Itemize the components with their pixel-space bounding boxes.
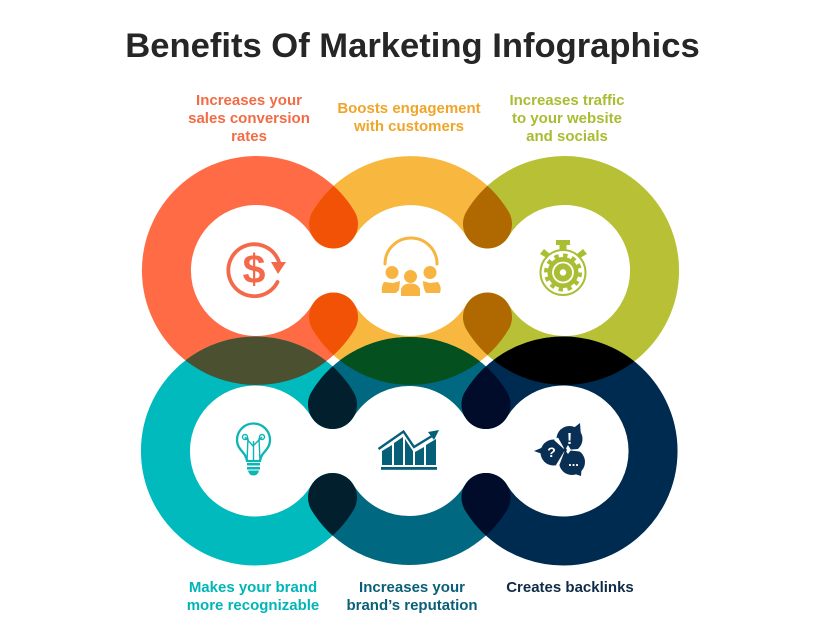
label: sales conversion	[188, 92, 310, 145]
icon: light bulb	[237, 424, 270, 476]
icon: speech bubbles	[534, 423, 585, 476]
label: reputation: Increases your	[359, 579, 465, 596]
overlap: teal and dark teal teardrops	[308, 366, 357, 536]
overlap: green and navy lens	[493, 336, 634, 385]
label: traffic: Increases traffic	[509, 92, 625, 109]
title: Benefits Of Marketing Infographics	[125, 27, 700, 65]
icon: speech bubbles: ?	[547, 444, 556, 460]
overlap: yellow and green teardrops	[463, 186, 512, 355]
icon: dollar cycle	[228, 244, 286, 296]
label: sales conversion: rates	[231, 128, 267, 145]
icon: audience group	[382, 238, 441, 296]
label: engagement: with customers	[353, 118, 464, 135]
ring: yellow	[334, 181, 488, 360]
icon: speech bubbles: !	[567, 431, 572, 448]
icon: speech bubbles: ...	[568, 454, 579, 469]
label: traffic: and socials	[526, 128, 608, 145]
overlap: orange and yellow teardrops	[309, 186, 358, 355]
ring: navy	[486, 361, 653, 541]
ring: orange	[166, 180, 334, 360]
label: reputation: brand’s reputation	[346, 597, 478, 614]
icon: dollar cycle: $	[243, 246, 266, 292]
icon: stopwatch with gear	[540, 240, 587, 295]
icon: growth chart	[378, 430, 439, 470]
label: traffic: to your website	[512, 110, 622, 127]
overlap: yellow and dark teal lens	[340, 337, 480, 385]
ring: teal	[165, 361, 332, 541]
overlap: dark teal and navy teardrops	[462, 366, 510, 536]
label: sales conversion: Increases your	[196, 92, 302, 109]
label: traffic	[509, 92, 625, 145]
label: engagement	[337, 100, 481, 135]
label: sales conversion: sales conversion	[188, 110, 310, 127]
label: engagement: Boosts engagement	[337, 100, 481, 117]
overlap: orange and teal lens	[186, 336, 326, 385]
label: recognizable: Makes your brand	[189, 579, 317, 596]
label: recognizable	[187, 579, 319, 614]
label: backlinks: Creates backlinks	[506, 579, 634, 596]
ring: dark teal	[332, 362, 486, 540]
label: reputation	[346, 579, 478, 614]
label: recognizable: more recognizable	[187, 597, 319, 614]
ring: olive green	[488, 180, 655, 360]
